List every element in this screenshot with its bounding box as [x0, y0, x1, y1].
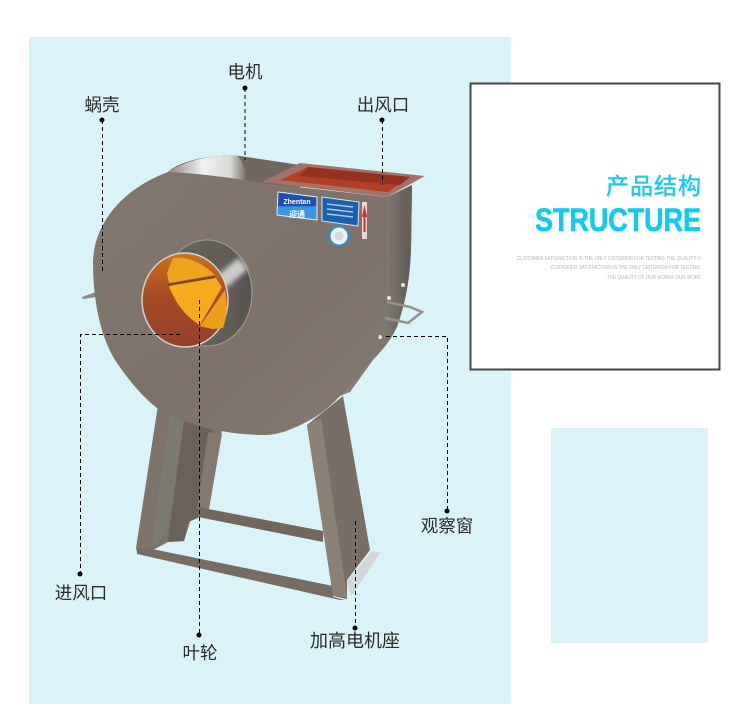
- fan stand: right leg: [307, 396, 380, 599]
- side lug: [82, 292, 96, 299]
- callout: 蜗壳: [84, 95, 120, 274]
- side wall edge strip: [404, 185, 412, 250]
- motor: [168, 156, 300, 190]
- nameplate: brand: [277, 192, 317, 220]
- fan stand: front bar: [137, 548, 345, 600]
- callout: 进风口: 进风口: [55, 583, 107, 603]
- panel: decorative light blue block: [551, 428, 708, 643]
- nameplate: specifications: [322, 197, 359, 226]
- heading: English title: STRUCTURE: [535, 202, 701, 238]
- text block: small caption: THE QUALITY OF OUR WORKF OUR WORK: [607, 275, 702, 281]
- callout: 进风口: [55, 334, 180, 603]
- heading: Chinese title: 产品结构: [606, 173, 701, 199]
- callout: 加高电机座: [310, 521, 400, 651]
- inlet tube: [162, 240, 252, 346]
- outlet opening: [280, 167, 410, 192]
- volute face: [93, 172, 388, 435]
- illustration: centrifugal fan: [82, 156, 425, 600]
- callout: 电机: [228, 62, 263, 160]
- callout: 电机: 电机: [228, 62, 263, 82]
- panel: heading frame: [470, 84, 720, 370]
- direction arrow plate: [362, 202, 367, 239]
- fan stand: rear legs and bars: [136, 405, 323, 552]
- text block: small caption: [517, 256, 702, 281]
- nameplate: brand: 迎通: [289, 209, 305, 219]
- text block: small caption: CUSTOMER SATISFACTION IS THE ONLY CRITERION FOR TESTING: [551, 265, 700, 271]
- nameplate: brand: Zhentan: [283, 199, 311, 206]
- leader lines and labels: [55, 62, 473, 663]
- panel: light blue product background: [29, 37, 511, 704]
- callout: 叶轮: 叶轮: [182, 643, 218, 663]
- inlet opening with impeller: [142, 253, 228, 347]
- callout: 蜗壳: 蜗壳: [84, 95, 120, 115]
- round badge: [330, 226, 348, 246]
- callout: 观察窗: [386, 336, 473, 536]
- text block: small caption: CUSTOMER SATISFACTION IS THE ONLY CRITERION FOR TESTING THE QUALITY O: [517, 256, 701, 262]
- callout: 出风口: [357, 95, 409, 185]
- volute side wall: [330, 185, 412, 400]
- callout: 加高电机座: 加高电机座: [310, 631, 400, 651]
- callout: 观察窗: 观察窗: [421, 516, 473, 536]
- outlet flange: [262, 163, 425, 197]
- callout: 出风口: 出风口: [357, 95, 409, 115]
- icon: handle of observation window: [378, 283, 422, 339]
- callout: 叶轮: [182, 300, 218, 663]
